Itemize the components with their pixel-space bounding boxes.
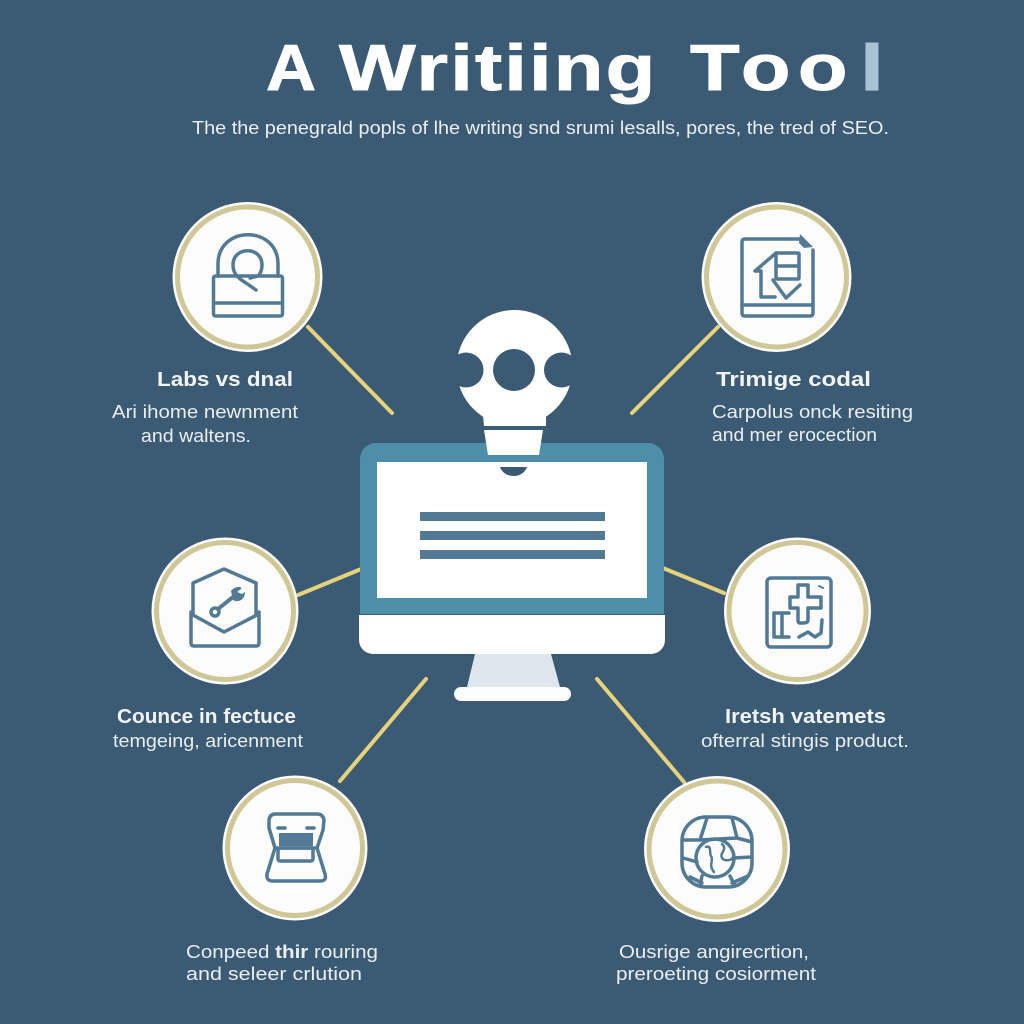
badge: lock icon	[172, 202, 322, 352]
description: Conpeed thir rouring	[186, 942, 378, 962]
heading: Trimige codal	[716, 369, 871, 391]
title: l	[860, 31, 884, 104]
badge: envelope and wrench icon	[152, 538, 298, 684]
title: Too	[690, 31, 848, 104]
panel: middle right	[701, 538, 909, 751]
description: Ari ihome newnment	[112, 402, 298, 422]
title	[266, 31, 884, 104]
light bulb	[448, 310, 579, 455]
monitor	[359, 443, 665, 701]
description: ofterral stingis product.	[701, 731, 909, 751]
description: and mer erocection	[712, 425, 877, 445]
description: temgeing, aricenment	[113, 731, 303, 751]
description	[616, 942, 816, 984]
panel: top right	[702, 202, 913, 445]
title: Writiing	[339, 31, 655, 104]
description: preroeting cosiorment	[616, 964, 816, 984]
panel: bottom left	[186, 776, 378, 984]
heading: Iretsh vatemets	[725, 706, 886, 728]
panel: bottom right	[616, 776, 816, 984]
panel: middle left	[113, 538, 303, 751]
description	[186, 942, 378, 984]
description	[112, 402, 298, 446]
badge: document icon	[702, 202, 852, 352]
description	[712, 402, 913, 445]
description: Ousrige angirecrtion,	[619, 942, 809, 962]
description: and waltens.	[141, 426, 251, 446]
badge: chart and cross icon	[724, 538, 871, 684]
panel: top left	[112, 202, 322, 446]
description: and seleer crlution	[186, 964, 362, 984]
badge: globe icon	[644, 776, 790, 922]
connector lines	[298, 327, 724, 782]
description: Carpolus onck resiting	[712, 402, 913, 422]
central illustration: monitor with light bulb	[359, 310, 665, 701]
subtitle: The the penegrald popls of lhe writing snd srumi lesalls, pores, the tred of SEO.	[192, 118, 889, 138]
title: A	[266, 31, 316, 104]
heading: Labs vs dnal	[157, 369, 293, 391]
badge: open device icon	[222, 776, 368, 920]
heading: Counce in fectuce	[117, 706, 296, 728]
